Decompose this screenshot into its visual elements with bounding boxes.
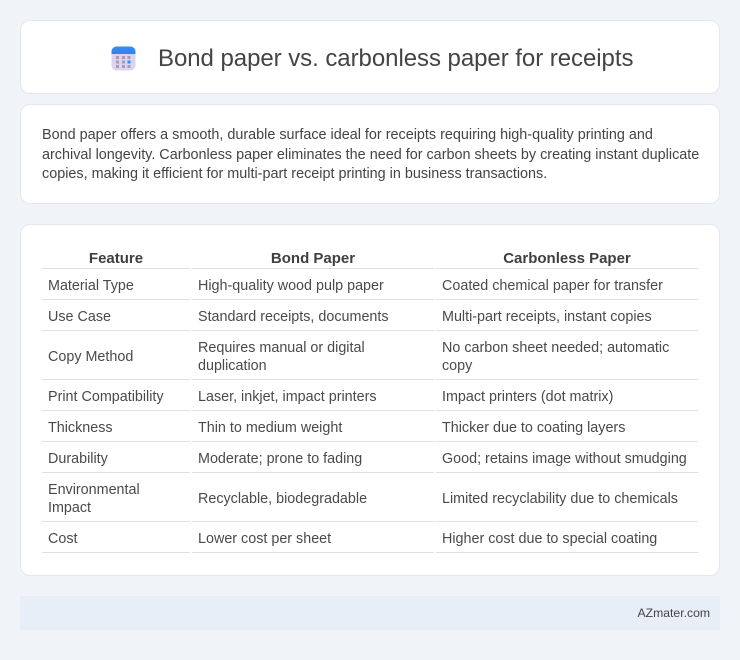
comparison table: [42, 250, 698, 553]
row: environmental impact: Limited recyclability due to chemicals: [442, 490, 678, 506]
table header: Feature: [89, 250, 143, 267]
row: environmental impact: [42, 482, 698, 522]
title: Bond paper vs. carbonless paper for receipts: [158, 45, 633, 72]
row: copy method: copy: [442, 358, 472, 374]
row: cost: Cost: [48, 530, 78, 546]
panel: comparison table: [20, 224, 720, 576]
icon: calendar: [112, 46, 136, 70]
intro paragraph: [42, 127, 699, 182]
row: durability: Moderate; prone to fading: [198, 450, 362, 466]
row: environmental impact: Environmental: [48, 482, 140, 498]
table header: Bond Paper: [271, 250, 355, 267]
row: use case: Use Case: [48, 308, 111, 324]
row: durability: Good; retains image without smudging: [442, 450, 687, 466]
row: use case: Standard receipts, documents: [198, 308, 389, 324]
row: environmental impact: Impact: [48, 500, 91, 516]
row: thickness: Thin to medium weight: [198, 420, 342, 436]
panel: introduction text: [20, 104, 720, 204]
row: copy method: Requires manual or digital: [198, 340, 365, 356]
row: print compatibility: Print Compatibility: [48, 388, 164, 404]
row: material type: Coated chemical paper for transfer: [442, 278, 663, 294]
footer bar: [20, 596, 720, 630]
row: thickness: [42, 420, 698, 442]
intro paragraph: Bond paper offers a smooth, durable surface ideal for receipts requiring high-quality printing and: [42, 127, 653, 143]
row: copy method: Copy Method: [48, 348, 133, 364]
row: print compatibility: Laser, inkjet, impact printers: [198, 388, 377, 404]
row: material type: Material Type: [48, 278, 134, 294]
row: print compatibility: [42, 388, 698, 411]
row: thickness: Thicker due to coating layers: [442, 420, 625, 436]
row: use case: Multi-part receipts, instant copies: [442, 308, 652, 324]
row: copy method: [42, 340, 698, 380]
row: cost: Higher cost due to special coating: [442, 530, 657, 546]
panel: title card: [20, 20, 720, 94]
row: material type: High-quality wood pulp paper: [198, 278, 384, 294]
row: durability: Durability: [48, 450, 108, 466]
table header: Carbonless Paper: [503, 250, 631, 267]
row: thickness: Thickness: [48, 420, 113, 436]
row: use case: [42, 308, 698, 331]
table header: [42, 250, 698, 553]
row: print compatibility: Impact printers (dot matrix): [442, 388, 613, 404]
row: durability: [42, 450, 698, 473]
intro paragraph: archival longevity. Carbonless paper eliminates the need for carbon sheets by creating instant duplicate: [42, 147, 699, 163]
footer credit: AZmater.com: [638, 606, 710, 620]
row: copy method: No carbon sheet needed; automatic: [442, 340, 669, 356]
row: cost: [42, 530, 698, 553]
intro paragraph: copies, making it efficient for multi-part receipt printing in business transactions.: [42, 166, 547, 182]
row: environmental impact: Recyclable, biodegradable: [198, 490, 367, 506]
row: cost: Lower cost per sheet: [198, 530, 331, 546]
row: copy method: duplication: [198, 358, 267, 374]
row: material type: [42, 278, 698, 300]
